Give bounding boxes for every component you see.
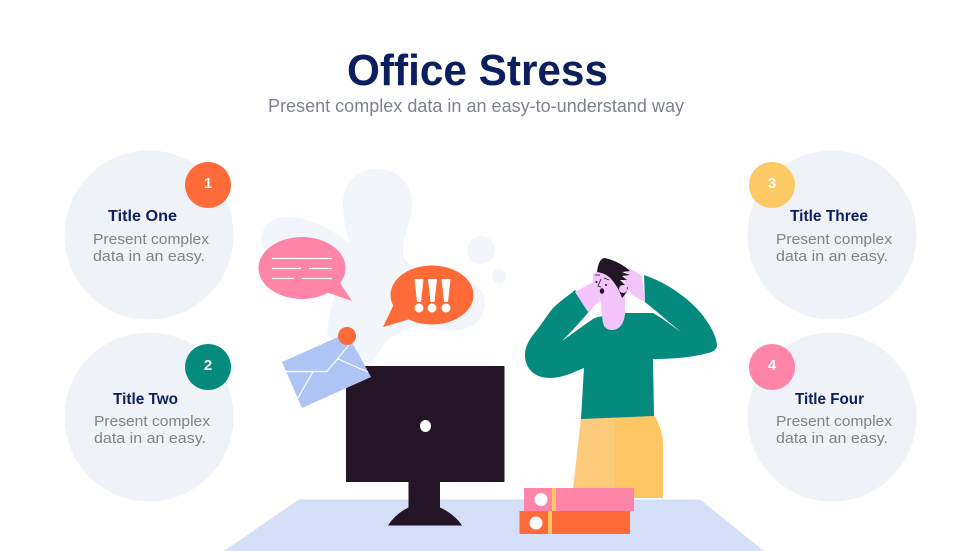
text: title one body: data in an easy. (93, 248, 205, 265)
ear (619, 285, 627, 293)
badge 4 (749, 344, 795, 390)
text: title one body: Present complex (93, 231, 210, 248)
text: title three body (776, 231, 893, 265)
neck and head (593, 270, 629, 330)
panel: title four (748, 332, 916, 502)
badge 1: 1 (204, 175, 212, 192)
badge 2: 2 (204, 357, 212, 374)
badge 3: 3 (768, 175, 776, 192)
subtitle: Present complex data in an easy-to-understand way (268, 96, 684, 116)
text: title one body (93, 231, 210, 265)
desk (224, 500, 764, 551)
eyes (596, 281, 607, 286)
text: title four body: data in an easy. (776, 430, 888, 447)
hair (597, 258, 630, 298)
badge 4: 4 (768, 357, 777, 374)
orange book (520, 511, 630, 534)
stressed person (525, 258, 717, 498)
panel: title one (64, 150, 234, 320)
heading: title four: Title Four (795, 391, 864, 408)
envelope icon (282, 327, 371, 408)
trousers (572, 416, 663, 498)
text: title four body: Present complex (776, 413, 893, 430)
text: title three body: data in an easy. (776, 248, 888, 265)
heading: title two: Title Two (113, 391, 178, 408)
text: title three body: Present complex (776, 231, 893, 248)
mouth (600, 288, 604, 294)
text: title two body (94, 413, 211, 447)
badge 3 (749, 162, 795, 208)
sweater (525, 275, 717, 419)
heading: title one: Title One (108, 208, 177, 225)
background blob (261, 169, 506, 365)
title: Office Stress (347, 46, 608, 95)
panel: title three (748, 150, 916, 320)
orange speech bubble (383, 266, 474, 327)
pink book (524, 488, 634, 511)
pink speech bubble (258, 237, 352, 301)
hands (575, 267, 645, 312)
text: title two body: data in an easy. (94, 430, 206, 447)
badge 2 (185, 344, 231, 390)
heading: title three: Title Three (790, 208, 868, 225)
panel: title two (64, 332, 234, 502)
monitor (346, 366, 504, 526)
text: title two body: Present complex (94, 413, 211, 430)
text: title four body (776, 413, 893, 447)
book stack (520, 488, 634, 534)
face details (595, 275, 609, 287)
badge 1 (185, 162, 231, 208)
